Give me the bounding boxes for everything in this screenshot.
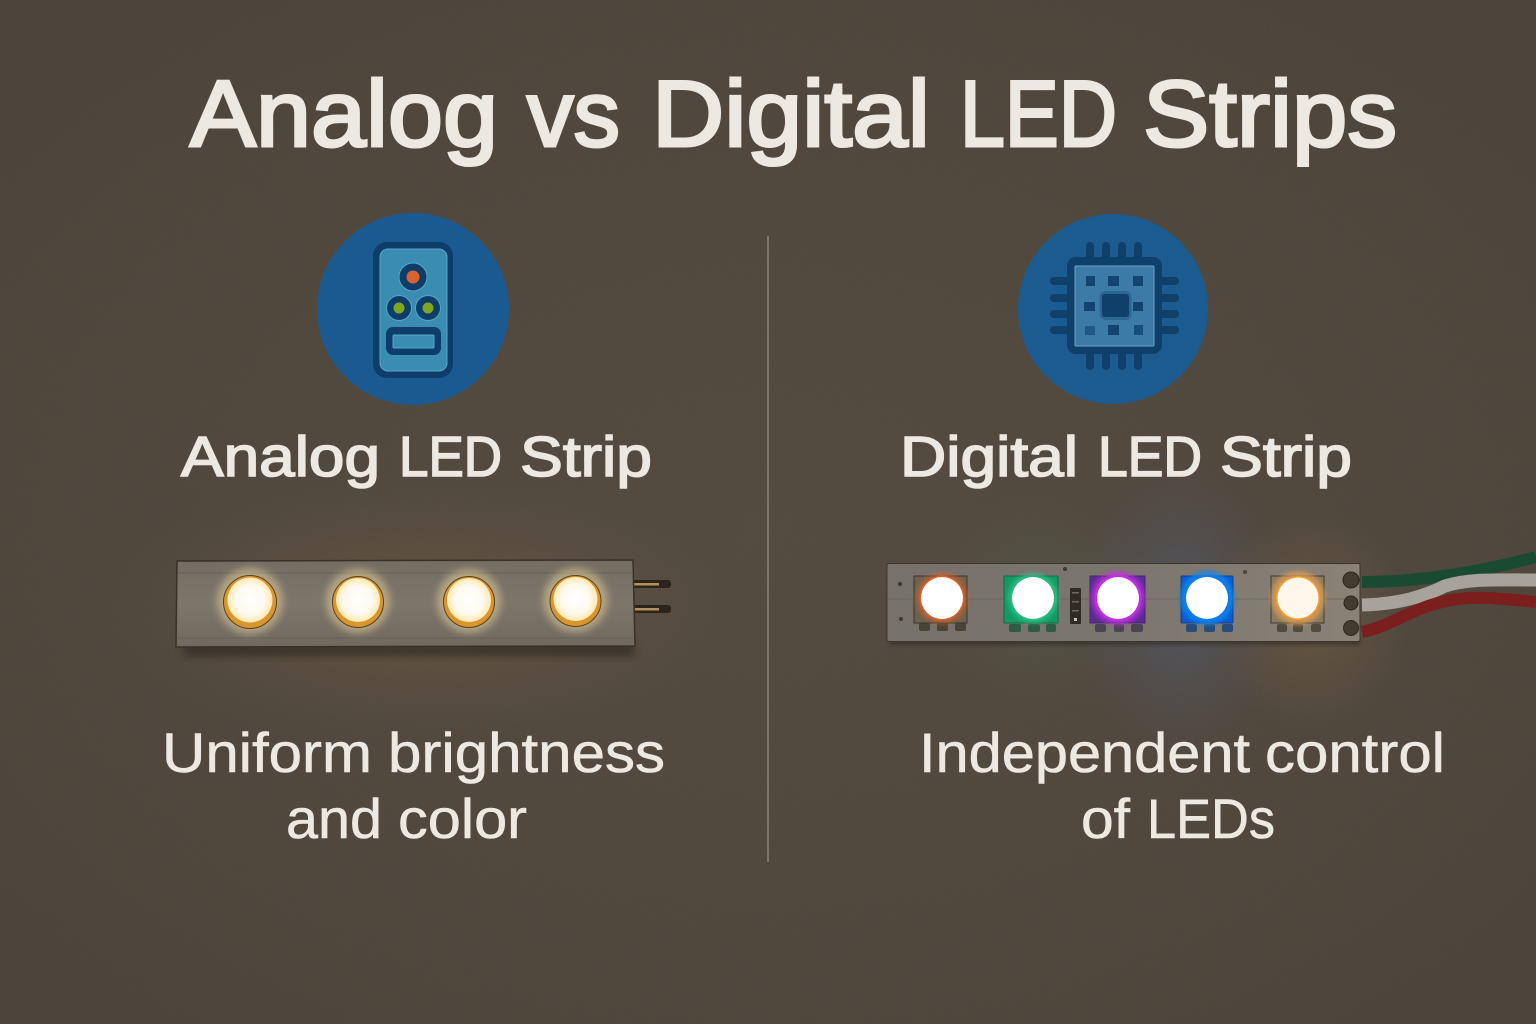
- wires: [1362, 557, 1536, 632]
- caption: analog: Uniform: [162, 721, 372, 784]
- LED: purple: [1090, 571, 1145, 632]
- icon: remote control in blue circle: [317, 213, 509, 405]
- caption: analog: and: [286, 787, 382, 850]
- solder pads: [1343, 572, 1359, 636]
- heading: digital: [900, 425, 1352, 489]
- caption: digital: Independent: [919, 721, 1250, 784]
- LED 1: [217, 568, 283, 634]
- LED 4: [544, 568, 608, 632]
- connector pins: [628, 580, 671, 613]
- icon: microchip in blue circle: [1018, 214, 1208, 404]
- driver chip: [1070, 588, 1081, 624]
- LED: green: [1004, 573, 1058, 632]
- caption: analog: color: [398, 787, 527, 850]
- caption: digital: control: [1265, 721, 1445, 784]
- board lines: [178, 573, 634, 638]
- heading: digital: LED: [1098, 425, 1202, 489]
- digital LED strip illustration: [887, 557, 1536, 645]
- caption: analog: brightness: [388, 721, 665, 784]
- caption: analog: [162, 721, 665, 850]
- heading: digital: Strip: [1220, 425, 1352, 489]
- title: Strips: [1143, 61, 1397, 166]
- analog LED strip illustration: [176, 560, 671, 656]
- heading: analog: Strip: [520, 425, 652, 489]
- caption: digital: LEDs: [1147, 787, 1275, 850]
- caption: digital: [919, 721, 1445, 850]
- title: LED: [960, 61, 1117, 166]
- caption: digital: of: [1081, 787, 1130, 850]
- LED: amber: [1271, 571, 1325, 632]
- LED: blue: [1180, 571, 1234, 632]
- panel: digital: [887, 214, 1536, 850]
- title: Digital: [652, 61, 930, 166]
- strip board: [176, 560, 635, 647]
- heading: analog: Analog: [181, 425, 380, 489]
- LED 2: [326, 569, 390, 633]
- title: vs: [527, 61, 620, 166]
- strip board: [887, 564, 1360, 645]
- title: [190, 61, 1397, 166]
- LED 3: [437, 569, 501, 633]
- center divider: [767, 236, 769, 862]
- title: Analog: [190, 61, 498, 166]
- panel: analog: [162, 213, 671, 850]
- heading: digital: Digital: [900, 425, 1078, 489]
- LED: orange: [914, 572, 968, 631]
- heading: analog: [181, 425, 652, 489]
- heading: analog: LED: [399, 425, 502, 489]
